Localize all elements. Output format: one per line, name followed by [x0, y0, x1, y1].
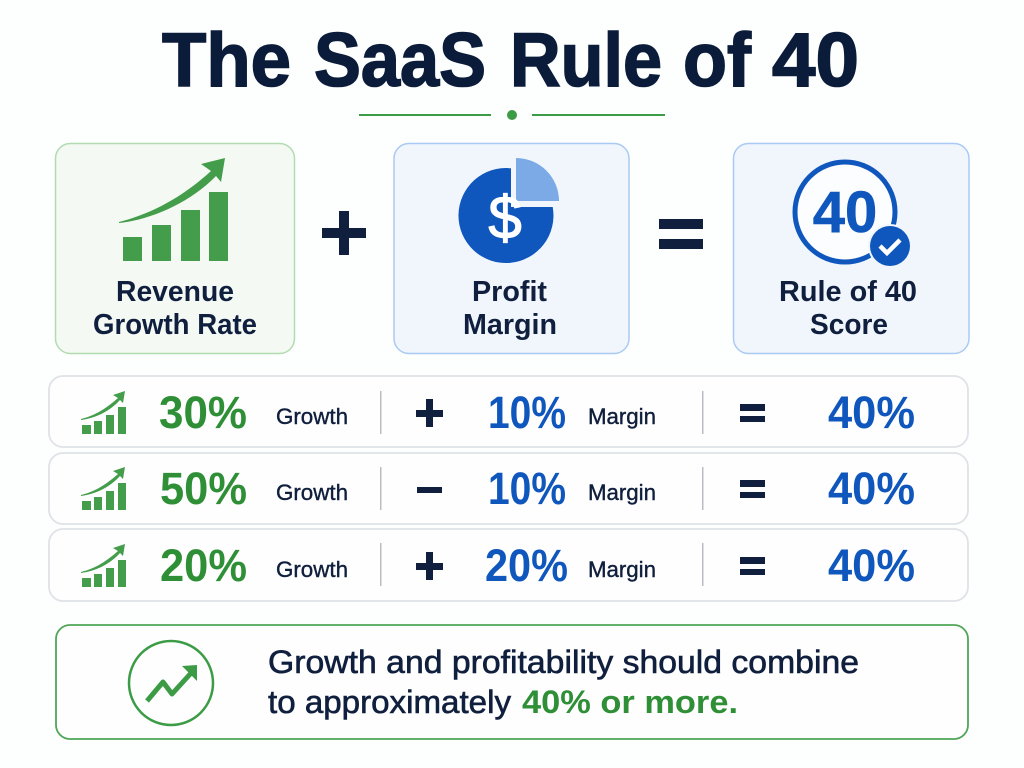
example row 3: [49, 529, 968, 601]
value: 50% growth: 50%: [160, 463, 247, 514]
result: 40%: 40%: [828, 387, 915, 438]
icon: growth bars with arrow: [119, 158, 228, 261]
label: growth: Growth: [276, 404, 348, 429]
operator: equals: [740, 480, 765, 498]
example row 1: [49, 376, 968, 447]
value: 20% growth: 20%: [160, 540, 247, 591]
operator: plus: [416, 399, 443, 427]
operator: equals: [740, 404, 765, 422]
operator: minus: [417, 487, 442, 493]
title: The: [162, 18, 291, 103]
title: of: [683, 18, 752, 103]
panel: revenue growth rate: [56, 144, 294, 354]
operator: equals: [740, 557, 765, 575]
callout highlight: 40% or more.: [522, 684, 738, 720]
icon: 40 ring with check badge: [795, 162, 912, 268]
title: Rule: [510, 18, 662, 103]
callout text line 2: to approximately: [268, 684, 511, 720]
label line: score: Score: [810, 309, 888, 341]
icon: mini growth chart: [81, 544, 126, 587]
title: SaaS: [314, 18, 486, 103]
title: 40: [772, 18, 859, 103]
icon: pie chart with dollar: [458, 158, 559, 263]
label line: growth rate: Growth Rate: [93, 309, 257, 341]
callout text line 1: Growth and profitability should combine: [268, 644, 859, 680]
label: rule of 40: Rule of 40: [779, 276, 917, 308]
title: [162, 18, 859, 103]
result: 40%: 40%: [828, 463, 915, 514]
example row 2: [49, 453, 968, 524]
operator: equals: [659, 219, 703, 249]
label: margin: Margin: [588, 557, 656, 582]
panel: rule of 40 score: [734, 144, 969, 354]
label: margin: Margin: [588, 480, 656, 505]
value: 10% margin: 10%: [488, 463, 566, 514]
icon: trend arrow in circle: [129, 641, 213, 725]
label: growth: Growth: [276, 557, 348, 582]
label: growth: Growth: [276, 480, 348, 505]
operator: plus: [322, 211, 366, 255]
icon: mini growth chart: [81, 467, 126, 510]
icon: pie chart with dollar: $: [488, 184, 522, 251]
result: 40%: 40%: [828, 540, 915, 591]
callout: takeaway: [56, 625, 968, 739]
value: 10% margin: 10%: [488, 387, 566, 438]
label: profit: Profit: [472, 276, 547, 308]
operator: plus: [416, 552, 443, 580]
panel: profit margin: [394, 144, 629, 354]
icon: mini growth chart: [81, 391, 126, 434]
icon: 40 ring with check badge: 40: [813, 180, 877, 245]
label: margin: Margin: [588, 404, 656, 429]
label: revenue growth rate: Revenue: [116, 276, 234, 308]
label line: margin: Margin: [463, 309, 557, 341]
title divider: [359, 110, 665, 120]
value: 20% margin: 20%: [485, 540, 568, 591]
value: 30% growth: 30%: [159, 387, 247, 438]
